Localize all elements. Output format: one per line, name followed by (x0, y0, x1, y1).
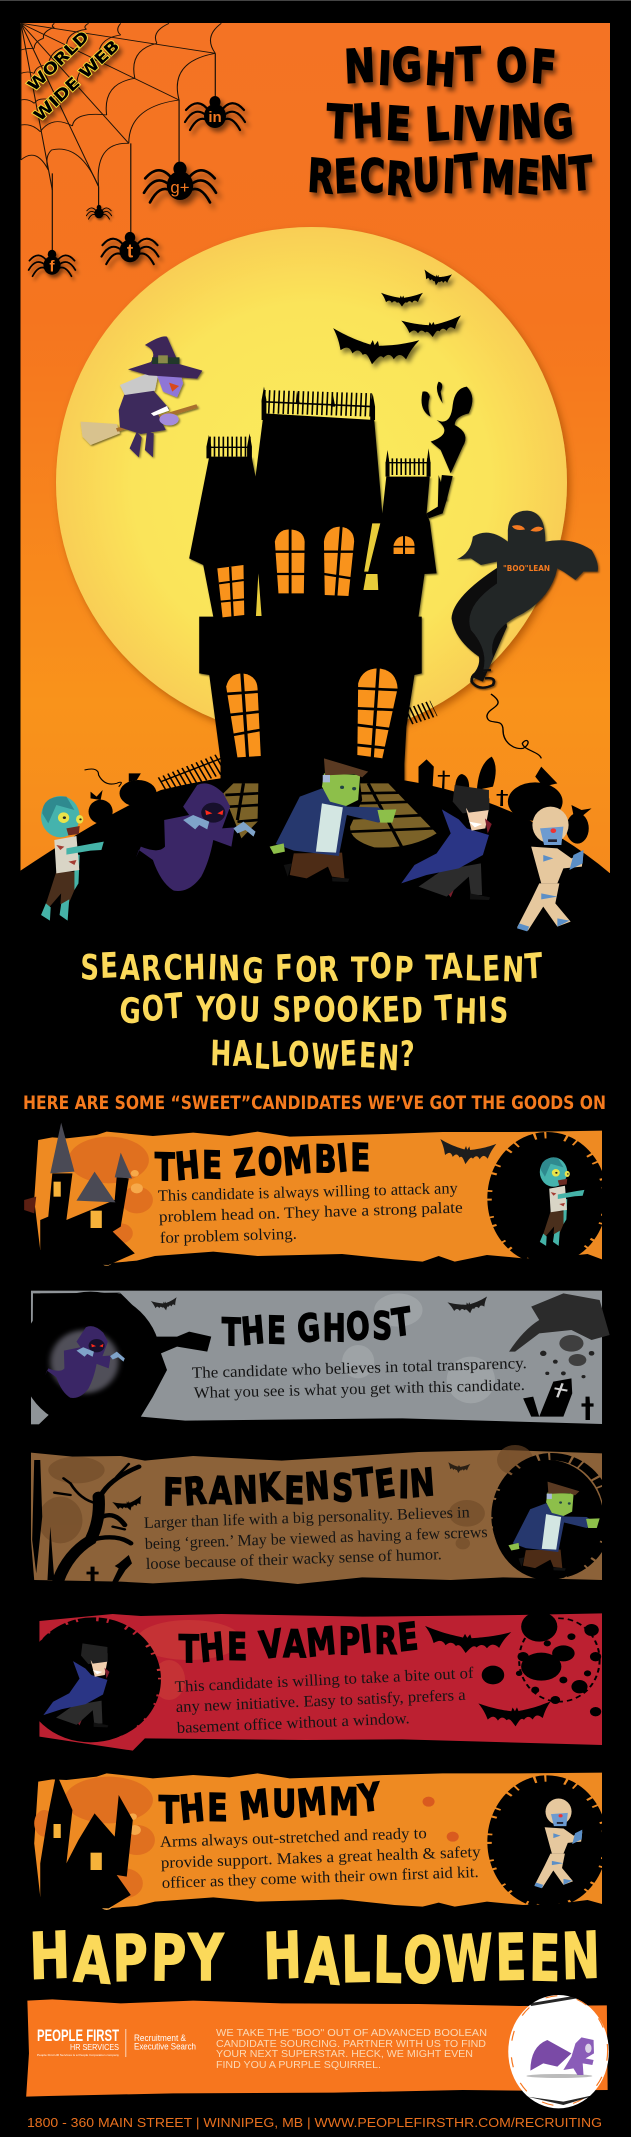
footer message: YOUR NEXT SUPERSTAR. HECK, WE MIGHT EVEN (216, 2049, 473, 2060)
icon: google plus spider: g+ (170, 178, 190, 197)
icon: linkedin spider: in (208, 109, 222, 126)
zombie description (158, 1180, 463, 1247)
footer message: CANDIDATE SOURCING. PARTNER WITH US TO FIND (216, 2039, 486, 2050)
hero: frankenstein (270, 758, 396, 882)
ghost portrait (45, 1326, 125, 1398)
small round window (393, 535, 415, 555)
zombie title: THE ZOMBIE (153, 1135, 374, 1190)
panel: the zombie (24, 1123, 603, 1266)
panel: orange night sky (20, 23, 610, 873)
logo: people first: PEOPLE FIRST (37, 2026, 119, 2045)
spooky tree (54, 1464, 139, 1580)
vampire title: THE VAMPIRE (177, 1614, 422, 1675)
web label: world wide web: WIDE WEB (30, 36, 123, 125)
frankenstein description: loose because of their wacky sense of humor. (146, 1546, 442, 1573)
web label: world wide web: WORLD (24, 27, 93, 95)
icon: twitter spider: t (127, 242, 134, 262)
footer message: WE TAKE THE "BOO" OUT OF ADVANCED BOOLEAN (216, 2028, 487, 2039)
vampire description: any new initiative. Easy to satisfy, prefers a (175, 1687, 466, 1716)
witch on broom (80, 336, 202, 457)
cobweb with spider threads (21, 23, 221, 250)
title: RECRUITMENT (306, 143, 596, 208)
heading: searching for top talent: GOT YOU SPOOKED THIS (119, 986, 510, 1033)
mummy description (160, 1825, 481, 1892)
moon (56, 227, 567, 738)
mummy description: Arms always out-stretched and ready to (160, 1825, 427, 1851)
footer message (216, 2028, 487, 2071)
heading: searching for top talent (80, 945, 545, 1080)
zombie description: for problem solving. (160, 1226, 297, 1247)
panel: the mummy (34, 1773, 603, 1910)
hero: vampire (401, 785, 492, 900)
splatter disc (482, 1612, 601, 1716)
heading: searching for top talent: HALLOWEEN? (210, 1034, 416, 1080)
icon: google plus spider (144, 162, 216, 202)
mummy title: THE MUMMY (157, 1775, 385, 1835)
black hill (21, 694, 610, 880)
ghost description (192, 1355, 527, 1402)
frankenstein description (144, 1504, 488, 1573)
roof fences (207, 402, 431, 467)
center right window (324, 526, 354, 596)
title: NIGHT OF (343, 36, 559, 98)
zombie description: problem head on. They have a strong palate (159, 1199, 463, 1226)
title: THE LIVING (326, 93, 577, 152)
heading: searching for top talent: SEARCHING FOR TOP TALENT (80, 945, 545, 993)
logo: people first (37, 2026, 196, 2057)
panel: frankenstein (31, 1445, 608, 1584)
frankenstein description: being ‘green.’ May be viewed as having a few screws (145, 1524, 488, 1553)
hero: zombie (41, 796, 104, 921)
frankenstein description: Larger than life with a big personality. Believes in (144, 1504, 470, 1532)
lower left window (225, 673, 261, 757)
hero: mummy (517, 807, 584, 931)
brick path (223, 783, 437, 848)
mummy description: officer as they come with their own first aid kit. (162, 1864, 479, 1892)
mummy description: provide support. Makes a great health & safety (161, 1844, 481, 1872)
bats over moon (329, 269, 463, 370)
vampire description: basement office without a window. (176, 1710, 410, 1737)
vampire portrait (43, 1643, 109, 1727)
top edge strip (0, 0, 631, 1)
smoke from chimney (422, 382, 472, 500)
logo: people first: People First HR Services is a People Corporation company (37, 2053, 120, 2057)
footer message: FIND YOU A PURPLE SQUIRREL. (216, 2060, 381, 2071)
ghost description: The candidate who believes in total transparency. (192, 1355, 527, 1382)
address line: 1800 - 360 MAIN STREET | WINNIPEG, MB | WWW.PEOPLEFIRSTHR.COM/RECRUITING (27, 2115, 602, 2130)
zombie description: This candidate is always willing to attack any (158, 1180, 458, 1205)
logo: people first: Recruitment & (134, 2033, 186, 2043)
ghost description: What you see is what you get with this candidate. (194, 1377, 525, 1402)
center left window (274, 528, 305, 594)
haunted house (189, 387, 447, 787)
ghost label: "BOO"LEAN (503, 564, 550, 573)
heading: happy halloween: HAPPY (28, 1918, 226, 2000)
footer banner (26, 1995, 609, 2108)
icon: small spider (86, 205, 112, 219)
icon: facebook spider: f (49, 259, 55, 276)
title (306, 36, 596, 208)
boolean ghost (452, 511, 598, 688)
frankenstein portrait (508, 1482, 600, 1571)
web label: world wide web (24, 27, 123, 125)
lower right window (357, 668, 398, 758)
upper left window (217, 565, 244, 617)
vampire description (174, 1665, 475, 1737)
panel: the ghost (20, 1291, 610, 1430)
frankenstein title: FRANKENSTEIN (161, 1458, 438, 1519)
hero: ghost (136, 783, 256, 891)
zombie portrait (540, 1157, 584, 1246)
icon: twitter spider (102, 232, 158, 264)
logo: people first: HR SERVICES (70, 2042, 119, 2052)
heading: happy halloween: HALLOWEEN (263, 1918, 603, 2001)
icon: linkedin spider (185, 96, 245, 130)
squirrel badge (508, 1995, 609, 2108)
graveyard silhouettes (89, 757, 592, 844)
vampire description: This candidate is willing to take a bite out of (174, 1665, 475, 1696)
heading: happy halloween (28, 1918, 603, 2001)
logo: people first: Executive Search (134, 2042, 196, 2052)
ghost title: THE GHOST (220, 1298, 415, 1356)
icon: facebook spider (29, 250, 75, 276)
mummy portrait (534, 1798, 582, 1888)
panel: the vampire (23, 1612, 602, 1751)
